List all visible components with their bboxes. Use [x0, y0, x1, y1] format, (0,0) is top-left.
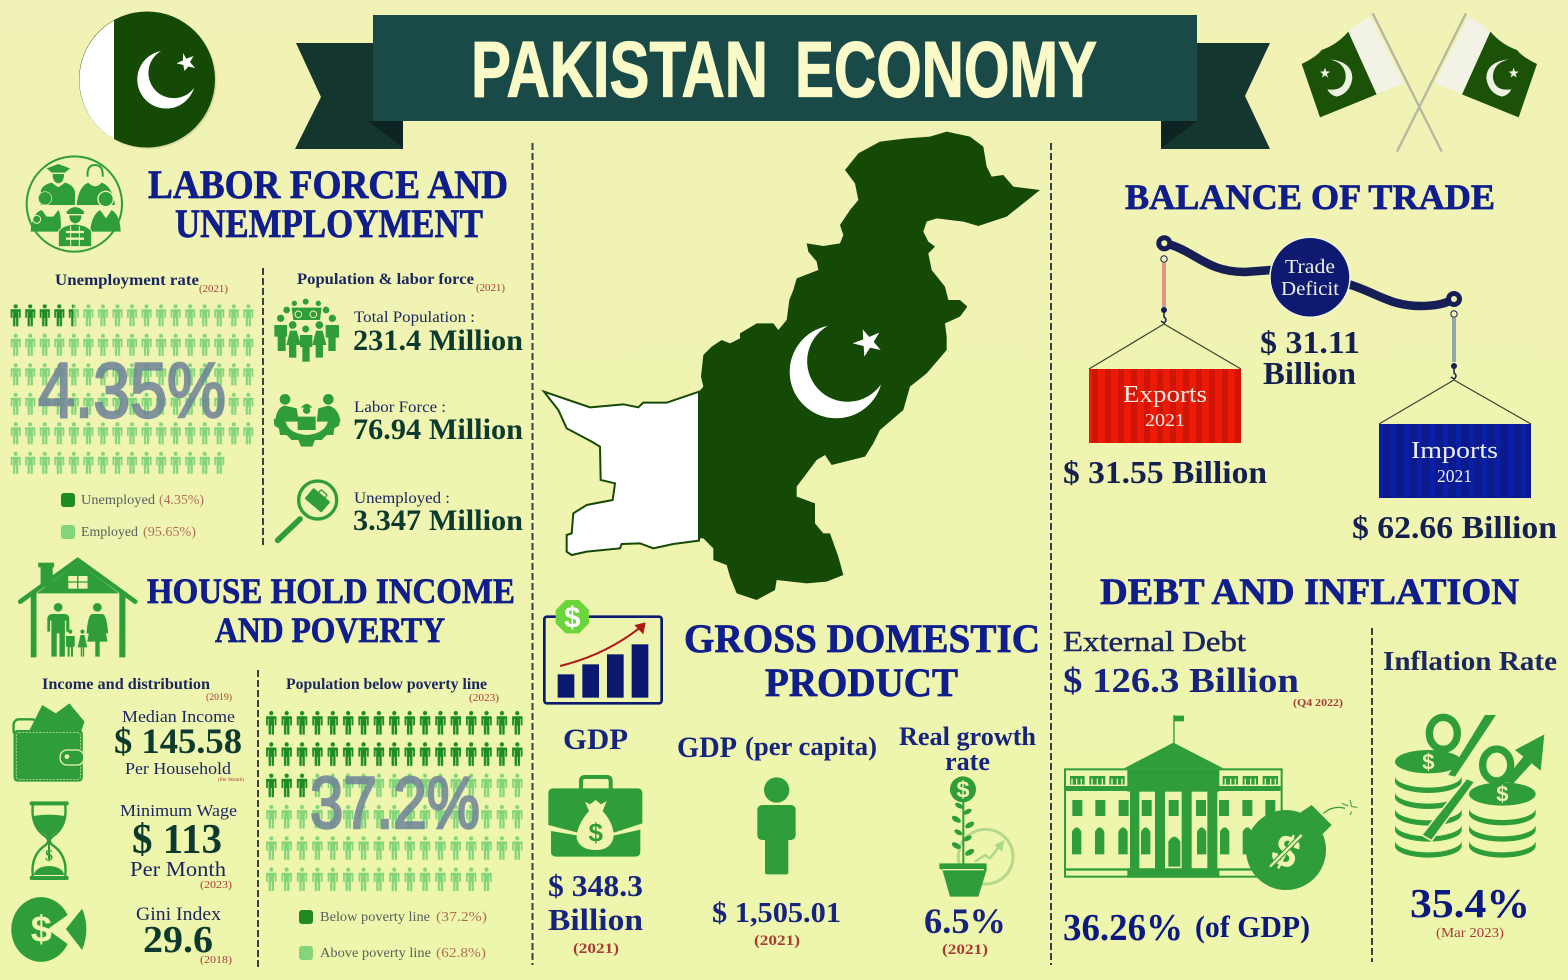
- heading: UNEMPLOYMENT: [175, 201, 483, 246]
- stat: real growth rate: rate: [945, 747, 990, 776]
- icon: gini pie with dollar: [11, 897, 86, 962]
- panel: balance of trade: [1063, 177, 1557, 545]
- stat: real growth rate: Real growth: [899, 722, 1037, 751]
- icon: house with family: [20, 560, 135, 657]
- stat: external debt: External Debt: [1063, 627, 1246, 658]
- map of Pakistan in flag colours: [544, 132, 1040, 600]
- icon: person: [757, 777, 796, 874]
- stat: real growth rate: (2021): [942, 942, 988, 958]
- stat: trade deficit: [1260, 324, 1360, 391]
- pictogram chart: unemployment 4.35%: 4.35%: [38, 346, 226, 434]
- stat: real growth rate: [899, 722, 1037, 958]
- icon: round Pakistan flag: [79, 12, 216, 149]
- panel: labor force and unemployment: [8, 156, 523, 540]
- legend: unemployment: [61, 492, 204, 539]
- stat: external debt: [1063, 627, 1343, 709]
- heading: LABOR FORCE AND: [148, 162, 508, 207]
- heading: PRODUCT: [765, 660, 958, 705]
- sub-heading: population below poverty line: Population below poverty line: [286, 676, 487, 693]
- legend: poverty: [299, 909, 487, 960]
- stat: minimum wage: Per Month: [130, 857, 227, 881]
- stat: debt to GDP: [1063, 907, 1310, 949]
- icon: wallet: [14, 703, 84, 782]
- icon: briefcase with money bag: $: [588, 818, 603, 848]
- icon: workers in circle: [27, 156, 122, 252]
- heading: BALANCE OF TRADE: [1125, 177, 1495, 217]
- label: inflation rate: Inflation Rate: [1383, 646, 1557, 676]
- stat: external debt: $ 126.3 Billion: [1063, 661, 1299, 700]
- container: exports: [1089, 256, 1241, 443]
- icon: hourglass with dollar: [30, 801, 69, 880]
- sub-heading: population below poverty line: (2023): [469, 693, 499, 704]
- legend: poverty: (37.2%): [436, 909, 487, 924]
- icon: government building with bomb: $: [1264, 823, 1308, 880]
- trade deficit badge: Trade: [1285, 256, 1335, 278]
- stat: GDP: $ 348.3: [548, 868, 643, 903]
- stat: GDP per capita: $ 1,505.01: [712, 897, 841, 929]
- icon: coins with percent and arrow: $: [1422, 749, 1434, 774]
- pictogram chart: poverty 37.2%: [264, 711, 525, 899]
- icon: coins with percent and arrow: [1395, 715, 1544, 858]
- sub-heading: population and labor force: Population & labor force: [297, 271, 474, 288]
- stat: minimum wage: [120, 801, 237, 891]
- sub-heading: population below poverty line: [286, 676, 499, 704]
- heading: [684, 616, 1040, 705]
- stat: median income: Median Income: [122, 707, 235, 726]
- crane rope: [1156, 235, 1462, 307]
- sub-heading: income and distribution: [42, 676, 232, 703]
- sub-heading: income and distribution: Income and distribution: [42, 676, 210, 693]
- stat: unemployed: 3.347 Million: [353, 504, 523, 537]
- stat: minimum wage: Minimum Wage: [120, 801, 237, 820]
- legend: poverty: (62.8%): [436, 945, 486, 960]
- pictogram chart: poverty 37.2%: 37.2%: [310, 763, 480, 844]
- pictogram chart: unemployment 4.35%: [8, 304, 256, 481]
- stat: debt to GDP: (of GDP): [1195, 909, 1310, 944]
- stat: GDP: [548, 723, 643, 957]
- container: imports: 2021: [1437, 466, 1472, 486]
- heading: [148, 162, 508, 246]
- stat: imports: $ 62.66 Billion: [1352, 509, 1557, 545]
- legend: poverty: Below poverty line: [320, 909, 430, 924]
- stat: labor force: Labor Force :: [354, 399, 446, 416]
- trade deficit badge: Deficit: [1281, 278, 1339, 300]
- stat: total population: 231.4 Million: [353, 324, 523, 357]
- stat: exports: $ 31.55 Billion: [1063, 454, 1267, 490]
- stat: GDP per capita: (2021): [754, 933, 800, 949]
- icon: money plant in pot: $: [957, 777, 970, 803]
- stat: external debt: (Q4 2022): [1293, 698, 1343, 709]
- title: PAKISTAN: [471, 24, 768, 114]
- icon: crowd: [274, 299, 339, 362]
- stat: trade deficit: $ 31.11: [1260, 324, 1360, 360]
- sub-heading: unemployment rate: (2021): [199, 284, 228, 295]
- stat: gini index: [136, 905, 233, 966]
- heading: GROSS DOMESTIC: [684, 616, 1040, 661]
- sub-heading: population and labor force: (2021): [476, 283, 505, 294]
- sub-heading: unemployment rate: [55, 272, 228, 295]
- stat: total population: [353, 309, 523, 357]
- title: ECONOMY: [795, 24, 1097, 114]
- heading: AND POVERTY: [215, 610, 445, 650]
- stat: minimum wage: $ 113: [132, 817, 222, 863]
- icon: money plant in pot: [939, 776, 1013, 897]
- heading: HOUSE HOLD INCOME: [147, 571, 515, 611]
- icon: rising bar chart: [544, 600, 662, 703]
- stat: real growth rate: 6.5%: [924, 901, 1006, 941]
- legend: unemployment: Unemployed: [81, 492, 155, 507]
- stat: total population: Total Population :: [354, 309, 475, 326]
- stat: debt to GDP: 36.26%: [1063, 907, 1183, 949]
- sub-heading: population and labor force: [297, 271, 505, 294]
- icon: magnifier with briefcase: [278, 481, 337, 540]
- stat: median income: Per Household: [125, 759, 232, 778]
- title: [471, 24, 1097, 114]
- container: imports: Imports: [1411, 438, 1498, 464]
- stat: inflation: (Mar 2023): [1436, 926, 1504, 941]
- container: exports: 2021: [1145, 410, 1185, 430]
- stat: gini index: (2018): [200, 955, 233, 966]
- stat: GDP: GDP: [563, 723, 628, 756]
- title banner: [295, 15, 1270, 149]
- stat: trade deficit: Billion: [1263, 355, 1356, 391]
- legend: unemployment: (95.65%): [143, 524, 196, 539]
- container: exports: Exports: [1123, 382, 1207, 408]
- legend: unemployment: Employed: [81, 524, 138, 539]
- legend: unemployment: (4.35%): [159, 492, 204, 507]
- container: imports: [1379, 311, 1531, 498]
- sub-heading: income and distribution: (2019): [206, 692, 232, 703]
- icon: hourglass with dollar: $: [45, 848, 53, 865]
- icon: rising bar chart: $: [564, 601, 580, 634]
- panel: household income and poverty: [11, 560, 525, 966]
- stat: labor force: [353, 399, 523, 446]
- heading: DEBT AND INFLATION: [1100, 572, 1519, 613]
- stat: GDP: (2021): [573, 941, 619, 957]
- panel: debt and inflation: [1063, 572, 1557, 949]
- panel: gross domestic product: [544, 600, 1040, 958]
- stat: GDP: Billion: [548, 902, 643, 937]
- stat: unemployed: Unemployed :: [354, 490, 450, 507]
- icon: workers and gear: [274, 394, 340, 447]
- icon: government building with bomb: [1065, 715, 1357, 890]
- stat: GDP per capita: [677, 731, 877, 949]
- icon: crossed flags: [1302, 13, 1537, 152]
- stat: median income: $ 145.58: [114, 721, 242, 761]
- stat: labor force: 76.94 Million: [353, 413, 523, 446]
- stat: median income: (Per Month): [218, 778, 244, 783]
- stat: gini index: 29.6: [143, 919, 213, 961]
- stat: GDP per capita: (per capita): [745, 732, 877, 761]
- stat: median income: [114, 707, 244, 783]
- sub-heading: unemployment rate: Unemployment rate: [55, 272, 199, 289]
- icon: briefcase with money bag: [548, 777, 642, 857]
- stat: inflation: 35.4%: [1410, 880, 1530, 926]
- stat: unemployed: [353, 490, 523, 537]
- icon: gini pie with dollar: $: [31, 908, 52, 950]
- stat: minimum wage: (2023): [200, 880, 233, 891]
- heading: [147, 571, 515, 650]
- icon: coins with percent and arrow: $: [1496, 782, 1508, 807]
- stat: GDP per capita: GDP: [677, 731, 737, 764]
- legend: poverty: Above poverty line: [320, 945, 431, 960]
- stat: gini index: Gini Index: [136, 905, 222, 925]
- trade deficit badge: [1270, 237, 1350, 317]
